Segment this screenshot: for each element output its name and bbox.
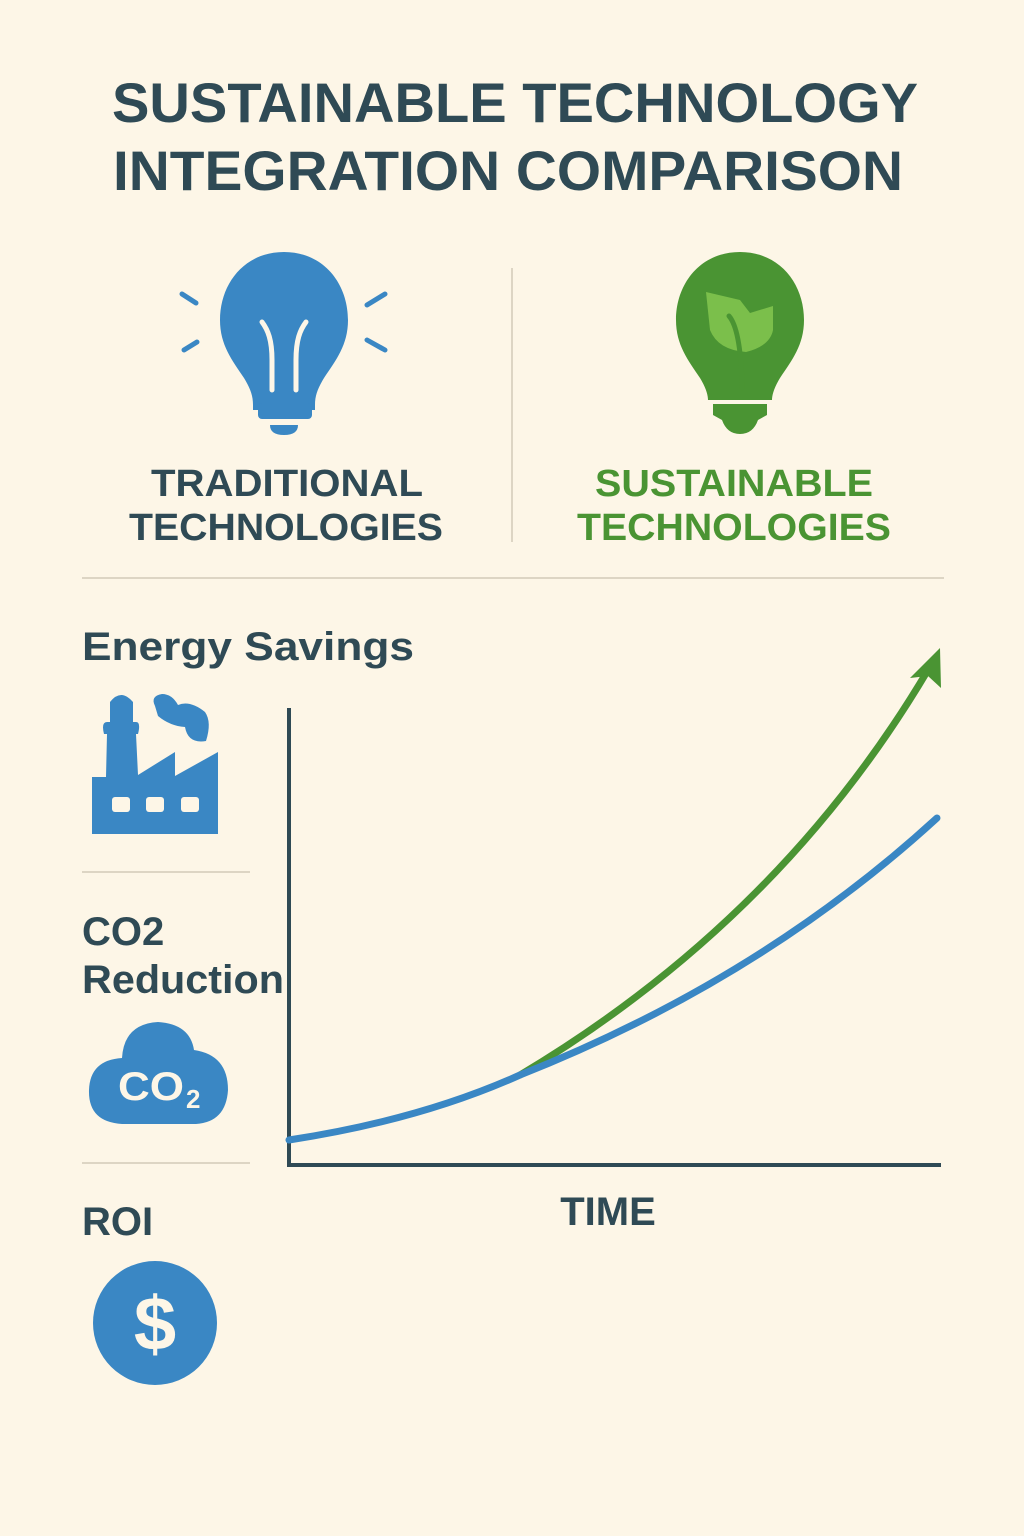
axis label: time: TIME [560, 1190, 656, 1234]
heading: co2 reduction: Reduction [82, 958, 284, 1002]
heading: co2 reduction [82, 910, 284, 1002]
heading: co2 reduction: CO2 [82, 910, 164, 954]
heading: roi: ROI [82, 1200, 153, 1244]
title: SUSTAINABLE TECHNOLOGY [112, 71, 918, 134]
blue line: traditional [289, 818, 937, 1140]
label: traditional technologies [129, 463, 443, 549]
heading: energy savings: Energy Savings [82, 625, 414, 669]
green line: sustainable [520, 648, 941, 1075]
line chart [289, 648, 941, 1165]
title [112, 71, 918, 202]
label: sustainable technologies [577, 463, 891, 549]
icon: factory [92, 694, 218, 834]
icon: co2 cloud [89, 1022, 228, 1124]
title: INTEGRATION COMPARISON [113, 139, 903, 202]
label: sustainable technologies: TECHNOLOGIES [577, 507, 891, 549]
icon: co2 cloud: 2 [186, 1084, 200, 1114]
icon: sustainable bulb with leaf [676, 252, 804, 434]
icon: co2 cloud: CO [118, 1065, 184, 1109]
label: traditional technologies: TRADITIONAL [151, 463, 423, 505]
icon: dollar [93, 1261, 217, 1385]
label: sustainable technologies: SUSTAINABLE [595, 463, 873, 505]
label: traditional technologies: TECHNOLOGIES [129, 507, 443, 549]
icon: dollar: $ [134, 1282, 176, 1367]
icon: traditional bulb [182, 252, 385, 435]
